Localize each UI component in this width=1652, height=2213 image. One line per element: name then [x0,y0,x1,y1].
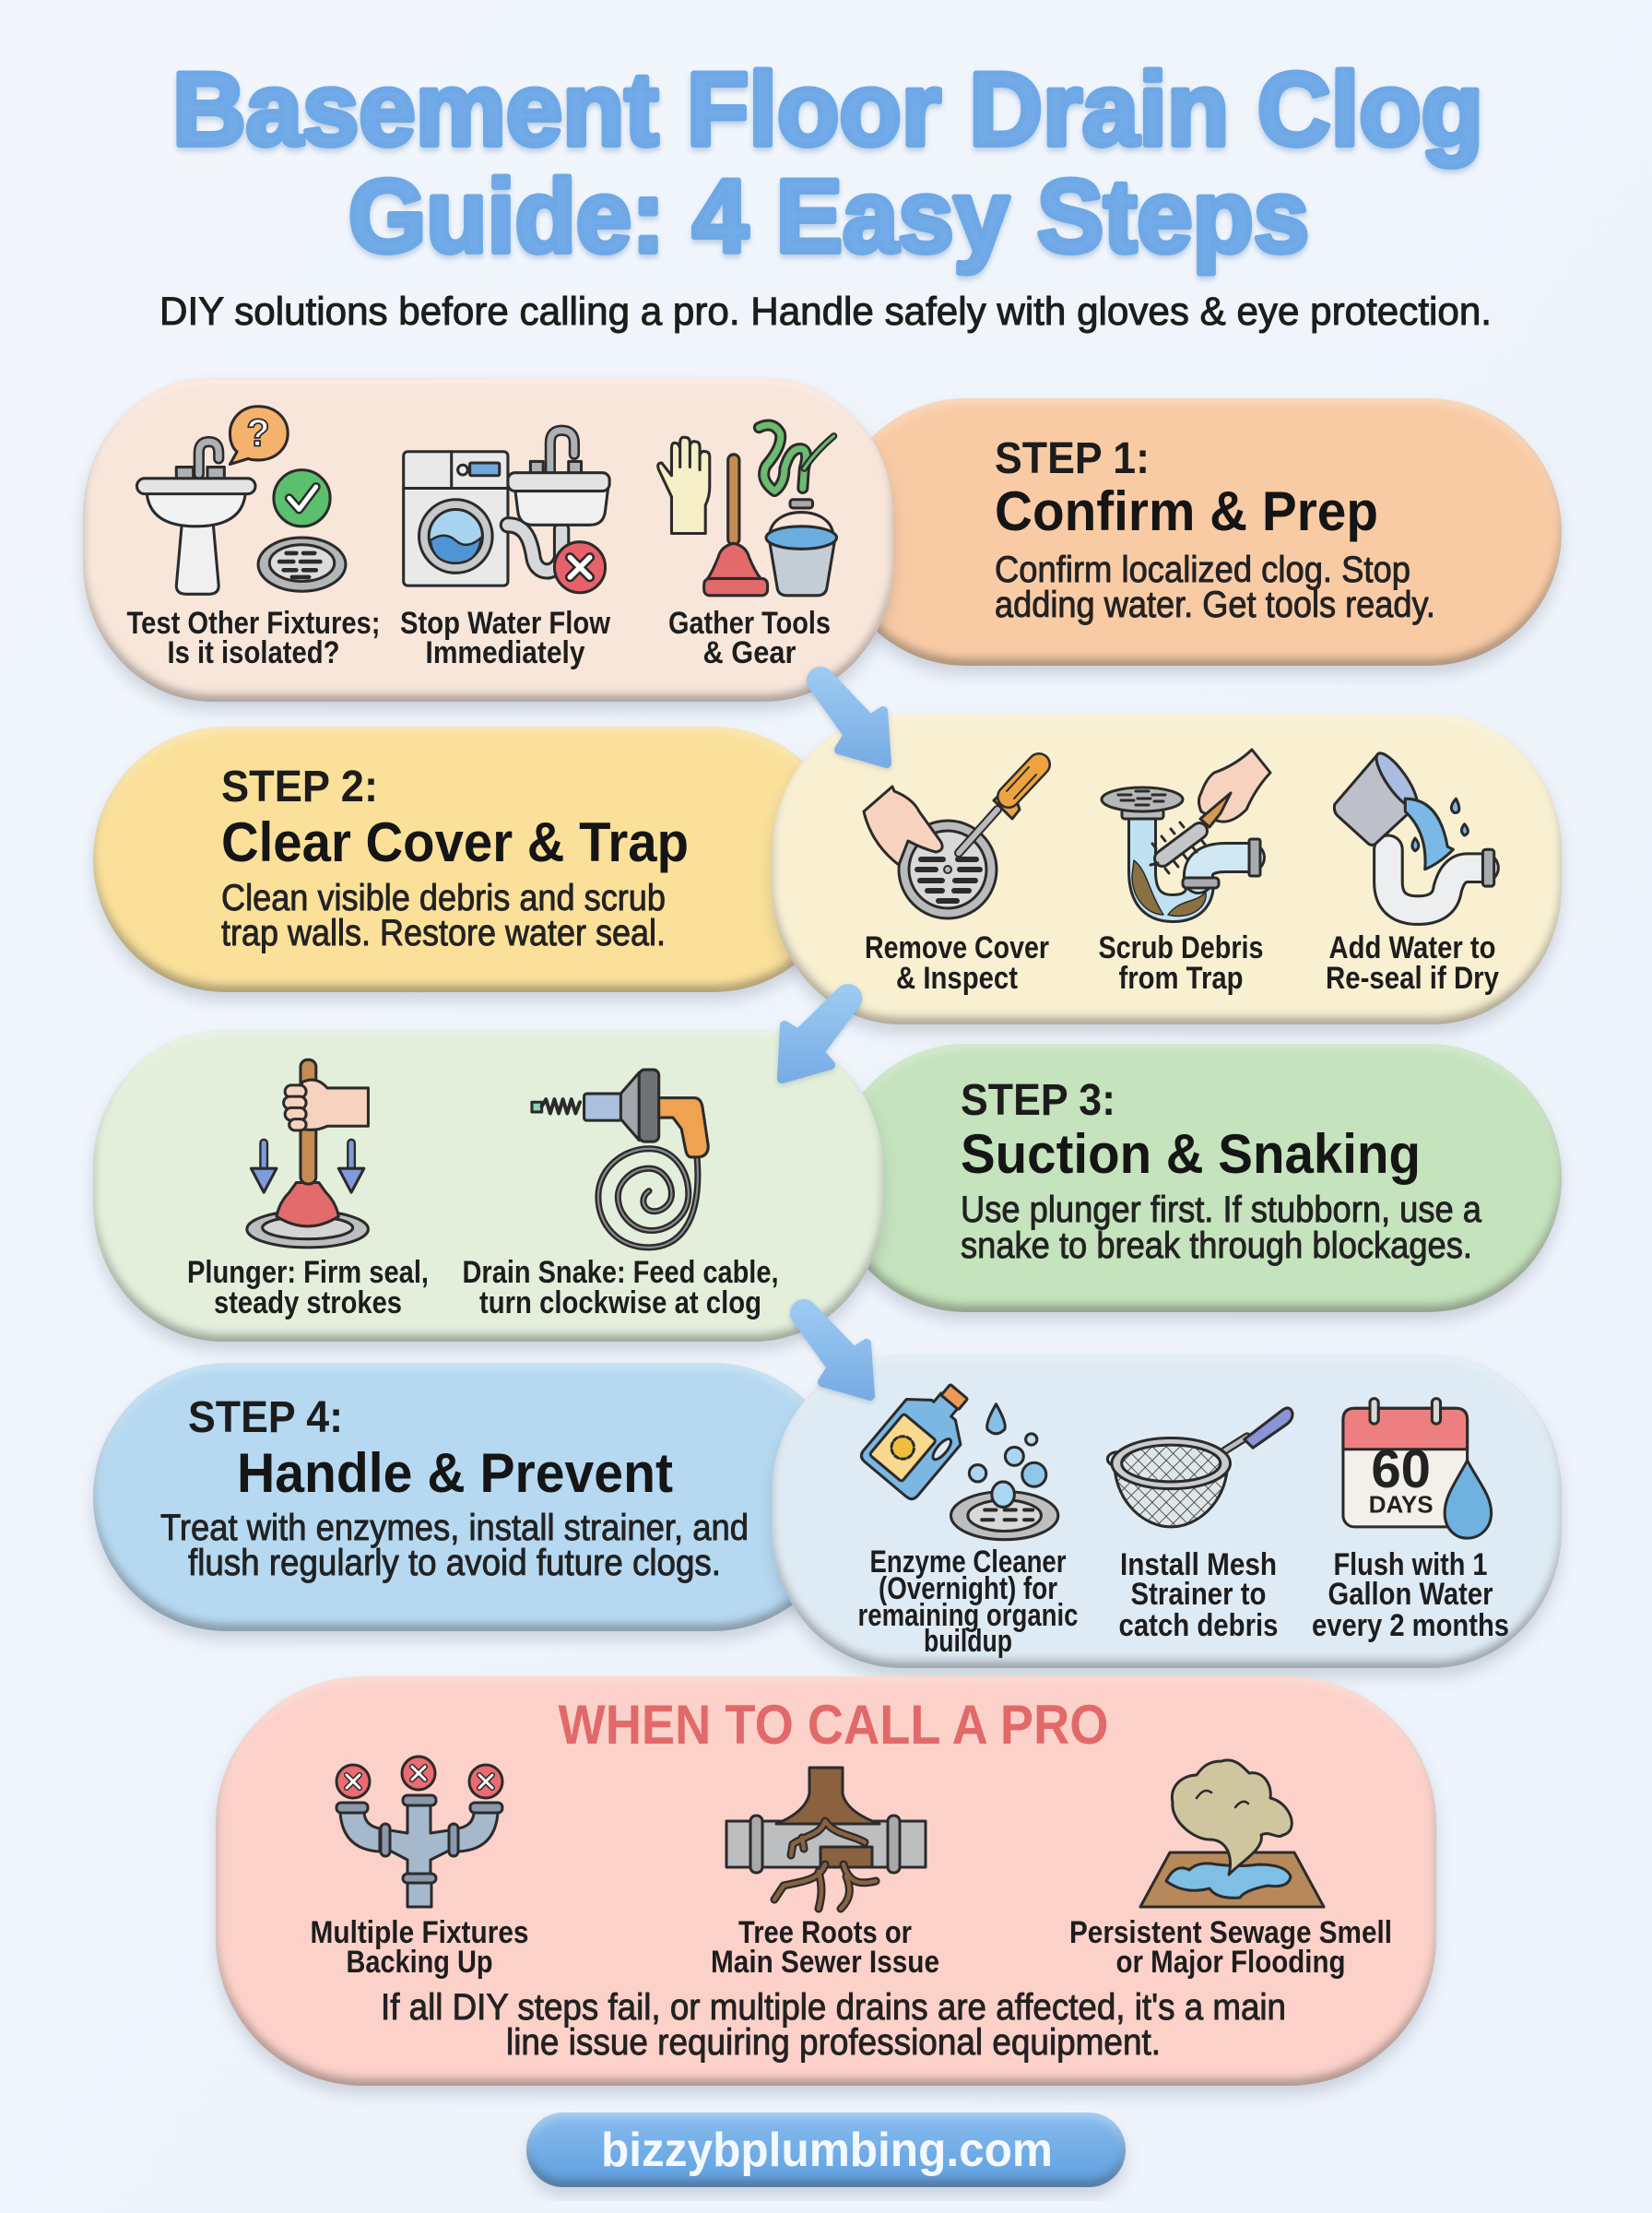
pro problem labels: Persistent Sewage Smell [1069,1915,1392,1950]
step 4 description: Treat with enzymes, install strainer, and [160,1508,749,1548]
step 2 description: Clean visible debris and scrub [221,878,666,918]
panel: when to call a pro [216,1676,1436,2086]
panel: step 2 summary [93,727,846,992]
step 1 action labels: Test Other Fixtures; [127,606,380,641]
panel: step 3 summary [832,1044,1562,1312]
icon: pouring water into trap [1334,748,1494,910]
pro problem labels: Backing Up [347,1945,492,1980]
icon: washer and sink with stop mark [404,431,609,593]
pro problem labels: Multiple Fixtures [310,1915,529,1950]
icon: multiple blocked fixtures [336,1757,502,1907]
step 4 action labels: Enzyme Cleaner [870,1544,1066,1580]
pro problem labels [310,1915,1392,1980]
panel: step 4 actions [772,1355,1562,1668]
icon: drain snake auger [532,1070,708,1248]
icon: 60 day calendar with water drop: 60 [1371,1439,1431,1499]
step 4 heading: STEP 4: [188,1393,343,1442]
pro problem labels: Main Sewer Issue [711,1945,939,1980]
icon: sewage smell and flooding [1140,1760,1324,1907]
step 1 description: adding water. Get tools ready. [995,585,1435,625]
icon: gloves, plunger, snake and bucket [658,425,837,596]
step 1 heading: STEP 1: [995,434,1150,483]
step 1 action labels: Is it isolated? [168,635,339,670]
pro conclusion text: If all DIY steps fail, or multiple drains are affected, it's a main [381,1987,1286,2028]
step 2 action labels: Re-seal if Dry [1326,961,1499,996]
step 2 description [221,878,666,953]
step 4 action labels: Gallon Water [1328,1577,1493,1612]
step 1 action labels: Immediately [426,635,585,670]
step 2 action labels: from Trap [1119,961,1243,996]
footer: website badge [526,2112,1126,2187]
step 3 description: Use plunger first. If stubborn, use a [961,1189,1482,1230]
step 3 heading: STEP 3: [961,1076,1115,1125]
step 3 description [961,1189,1482,1266]
title [172,52,1483,274]
panel: step 1 actions [83,377,893,702]
icon: mesh strainer [1107,1408,1292,1527]
step 4 heading: Handle & Prevent [237,1442,673,1504]
panel: step 1 summary [832,398,1562,666]
step 1 description: Confirm localized clog. Stop [995,550,1410,590]
step 2 heading [221,763,689,873]
arrow: step 2 to step 3 [782,988,857,1079]
icon: sink with question, check and drain: ? [246,412,270,455]
icon: removing drain cover [864,764,1039,918]
step 1 action labels: & Gear [702,635,796,670]
step 2 heading: Clear Cover & Trap [221,811,689,873]
step 4 action labels [857,1544,1509,1659]
step 3 heading: Suction & Snaking [961,1123,1421,1185]
pro conclusion text: line issue requiring professional equipment. [506,2022,1161,2063]
step 2 action labels: Remove Cover [865,930,1049,965]
icon: plunger with hand and arrows [247,1059,368,1248]
step 1 description [995,550,1435,625]
step 4 action labels: catch debris [1119,1608,1278,1643]
step 2 action labels [865,930,1499,996]
icon: enzyme cleaner bottle [858,1369,1058,1540]
panel: step 3 actions [93,1030,883,1342]
pro conclusion text [381,1987,1286,2063]
step 2 action labels: Scrub Debris [1099,930,1263,965]
panel: step 4 summary [93,1363,846,1631]
step 3 action labels: turn clockwise at clog [479,1285,761,1320]
step 2 action labels: & Inspect [896,961,1018,996]
step 2 heading: STEP 2: [221,763,378,811]
step 4 action labels: Strainer to [1130,1577,1267,1612]
step 1 action labels [127,606,831,670]
footer: website badge: bizzybplumbing.com [601,2124,1053,2177]
step 3 description: snake to break through blockages. [961,1225,1472,1266]
step 4 action labels: Install Mesh [1120,1547,1277,1582]
step 3 heading [961,1076,1421,1185]
pro problem labels: Tree Roots or [738,1915,912,1950]
step 3 action labels: Drain Snake: Feed cable, [463,1255,778,1290]
step 1 action labels: Gather Tools [668,606,831,641]
step 1 action labels: Stop Water Flow [400,606,610,641]
step 2 action labels: Add Water to [1329,930,1495,965]
icon: tree roots through sewer pipe [726,1768,926,1909]
step 3 action labels: steady strokes [214,1285,402,1320]
pro heading: WHEN TO CALL A PRO [559,1694,1108,1756]
title: Guide: 4 Easy Steps [348,159,1309,274]
step 4 action labels: Flush with 1 [1333,1547,1488,1582]
step 1 heading [995,434,1378,542]
step 4 action labels: remaining organic [857,1598,1079,1633]
step 3 action labels: Plunger: Firm seal, [187,1255,429,1290]
step 3 action labels [187,1255,778,1320]
title: Basement Floor Drain Clog [172,52,1483,167]
step 4 action labels: buildup [924,1624,1012,1659]
icon: 60 day calendar with water drop [1343,1399,1492,1538]
icon: sink with question, check and drain [136,407,346,594]
step 4 action labels: every 2 months [1312,1608,1509,1643]
step 4 action labels: (Overnight) for [879,1571,1057,1606]
step 4 description: flush regularly to avoid future clogs. [188,1543,721,1583]
step 4 heading [188,1393,673,1504]
panel: step 2 actions [772,714,1562,1024]
icon: 60 day calendar with water drop: DAYS [1369,1491,1434,1519]
icon: scrubbing the trap [1102,750,1270,916]
step 2 description: trap walls. Restore water seal. [221,913,666,953]
step 1 heading: Confirm & Prep [995,480,1378,542]
pro problem labels: or Major Flooding [1115,1945,1346,1980]
arrow: step 1 to step 2 [811,671,887,763]
arrow: step 3 to step 4 [795,1304,870,1396]
step 4 description [160,1508,749,1583]
subtitle: DIY solutions before calling a pro. Handle safely with gloves & eye protection. [159,290,1492,334]
